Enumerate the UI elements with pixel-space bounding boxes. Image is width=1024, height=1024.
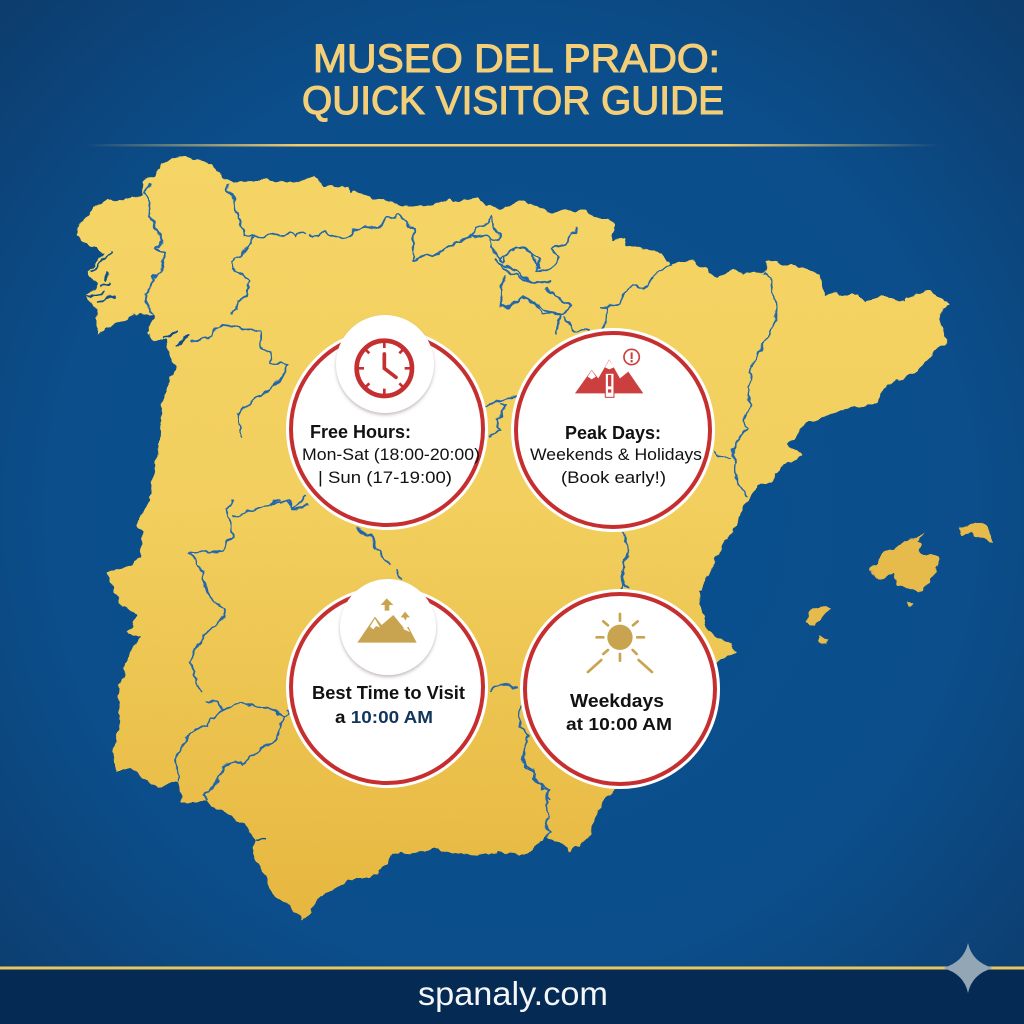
- map of Spain: [75, 157, 993, 920]
- weekdays text: [566, 691, 672, 734]
- card: best time to visit: [286, 579, 488, 788]
- free hours text: [302, 422, 480, 487]
- regional borders: northwest: [143, 183, 560, 437]
- card: peak days: [511, 328, 715, 532]
- card: weekdays: [520, 589, 720, 789]
- peak days text: Weekends & Holidays: [530, 445, 702, 464]
- title: MUSEO DEL PRADO:: [313, 37, 720, 81]
- icon: mountains with warning: [575, 349, 643, 397]
- regional borders: centre: [270, 396, 517, 550]
- title: [302, 37, 724, 123]
- icon: clock badge: [336, 315, 434, 413]
- footer website: spanaly.com: [418, 975, 608, 1012]
- peak days text: (Book early!): [561, 468, 666, 487]
- Balearic Islands: [805, 523, 993, 643]
- icon: sparkle star: [943, 943, 993, 993]
- best time text: [312, 683, 465, 727]
- best time text: Best Time to Visit: [312, 683, 465, 703]
- regional borders: southeast: [397, 570, 630, 800]
- title: QUICK VISITOR GUIDE: [302, 79, 724, 123]
- free hours text: Mon-Sat (18:00-20:00): [302, 445, 480, 464]
- weekdays text: Weekdays: [570, 691, 664, 711]
- peak days text: [530, 423, 702, 487]
- footer band: [0, 966, 1024, 1024]
- card: free hours: [286, 315, 488, 530]
- weekdays text: at 10:00 AM: [566, 714, 672, 734]
- free hours text: Free Hours:: [310, 422, 411, 442]
- regional borders: northeast: [500, 227, 776, 593]
- icon: mountains badge: [340, 579, 436, 675]
- peak days text: Peak Days:: [565, 423, 661, 443]
- free hours text: | Sun (17-19:00): [318, 468, 452, 487]
- regional borders: southwest: [175, 500, 390, 840]
- icon: sun: [588, 614, 652, 672]
- mainland outline: [75, 157, 950, 920]
- best time text: a 10:00 AM: [335, 707, 433, 727]
- rias and coastal inlets: [86, 252, 188, 344]
